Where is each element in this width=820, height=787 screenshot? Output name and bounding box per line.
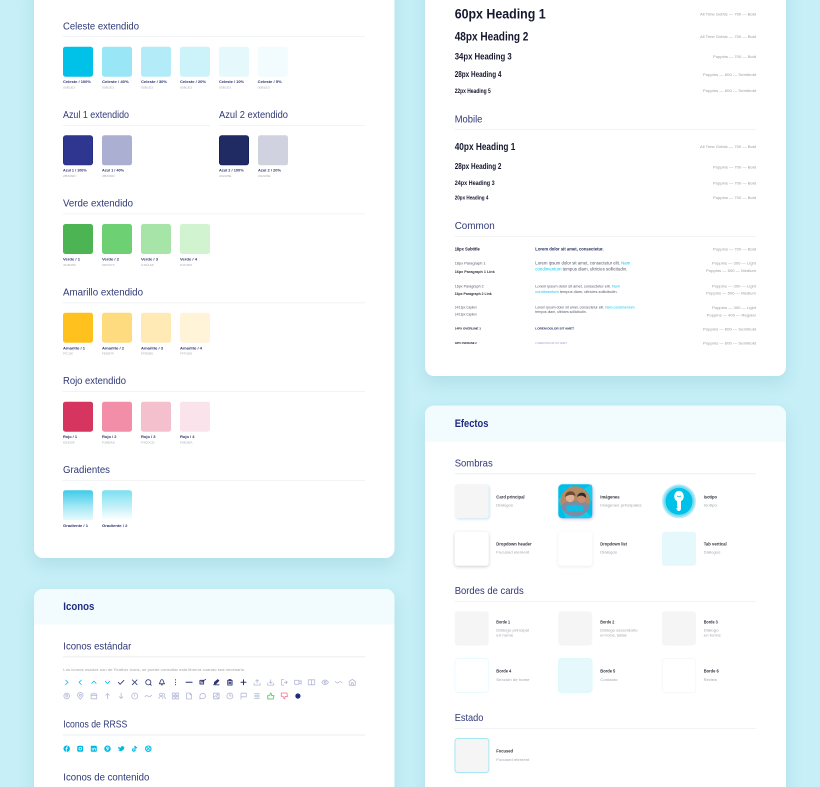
dropdown header shadow sample: Dropdown header (496, 542, 532, 547)
section: Rojo extendido: F28EA8 (102, 440, 115, 444)
common text styles: Poppins — 300 — Light (712, 284, 756, 288)
section: Amarillo extendido: Amarillo / 4 (180, 346, 203, 350)
common text styles: Poppins — 300 — Light (712, 306, 756, 310)
desktop headings: Poppins — 600 — Semibold (703, 73, 756, 77)
common text styles: 16px Paragraph 1 (455, 261, 486, 266)
mobile headings: 24px Heading 3 (455, 180, 495, 187)
section: Celeste extendido: 00B1E3 (102, 85, 114, 89)
imágenes shadow sample: Imágenes principales (600, 503, 642, 508)
panel: iconos (34, 589, 394, 787)
desktop headings: 34px Heading 3 (455, 52, 512, 62)
section: Rojo extendido: Rojo extendido (63, 375, 126, 387)
isotipo shadow sample: Isotipo (704, 495, 717, 500)
common text styles: tempus diam, ultricies sollicitudin. (535, 310, 587, 314)
common text styles: Poppins — 600 — Semibold (703, 328, 756, 332)
card principal shadow sample (455, 484, 525, 518)
common text styles: condimentum tempus diam, ultricies sollicitudin. (535, 266, 627, 272)
common text styles: condimentum tempus diam, ultricies sollicitudin. (535, 289, 618, 294)
mobile headings: Poppins — 700 — Bold (713, 166, 756, 170)
imágenes shadow sample (558, 484, 642, 518)
section: Azul 2 extendido (219, 109, 365, 178)
borde 6: Review (704, 677, 717, 682)
tab vertical sample: Diálogos (704, 550, 720, 555)
dropdown list shadow sample: Dropdown list (600, 542, 628, 547)
section: Celeste extendido: 00B1E3 (180, 85, 192, 89)
borde 5: Borde 5 (600, 669, 616, 674)
section: Bordes de cards (455, 585, 756, 692)
mobile headings: Mobile (455, 114, 483, 126)
common text styles: Poppins — 500 — Medium (706, 292, 756, 296)
heading: Iconos estándar: Iconos estándar (63, 640, 132, 652)
focused state sample: Focused (496, 749, 513, 754)
section: Azul 2 extendido: 202A5E (258, 174, 270, 178)
desktop headings: Poppins — 700 — Bold (713, 55, 756, 59)
borde 3 (662, 612, 721, 646)
borde 1: Borde 1 (496, 619, 511, 624)
mobile headings: Poppins — 700 — Bold (713, 196, 756, 200)
common text styles: 16px Paragraph 1 Link (455, 269, 495, 274)
borde 5: Contacto (600, 677, 618, 682)
section: Celeste extendido: Celeste extendido (63, 20, 139, 32)
section: Amarillo extendido (63, 286, 365, 356)
section: Verde extendido: Verde / 3 (141, 258, 158, 262)
section: Celeste extendido: Celeste / 5% (258, 80, 282, 84)
mobile headings: All Time Gothic — 700 — Bold (700, 145, 756, 149)
section: Celeste extendido: Celeste / 40% (102, 80, 130, 84)
section: Sombras: Sombras (455, 458, 493, 470)
section: Verde extendido (63, 198, 365, 267)
section: Estado (455, 712, 756, 772)
desktop headings: 22px Heading 5 (455, 88, 491, 95)
panel: tipografía (425, 0, 786, 376)
desktop headings: Poppins — 600 — Semibold (703, 89, 756, 93)
section: Azul 2 extendido: Azul 2 / 100% (219, 169, 244, 173)
section: Verde extendido: Verde / 4 (180, 258, 198, 262)
focused state sample (455, 738, 530, 772)
section: Celeste extendido: Celeste / 20% (180, 80, 207, 84)
borde 3: Diálogo (704, 628, 720, 633)
common text styles: Poppins — 400 — Regular (707, 314, 757, 318)
common text styles: Lorem ipsum dolor sit amet, consectetur elit. Nam condimentum (535, 306, 635, 310)
common text styles: 16px Paragraph 2 Link (455, 292, 492, 296)
dropdown list shadow sample (558, 532, 628, 566)
desktop headings: 60px Heading 1 (455, 6, 546, 21)
card principal shadow sample: Diálogos (496, 503, 513, 508)
common text styles: Poppins — 500 — Medium (706, 269, 756, 273)
section: Celeste extendido: 00B1E3 (141, 85, 153, 89)
section: Amarillo extendido: FEDB7F (102, 352, 114, 356)
section: Amarillo extendido: Amarillo extendido (63, 286, 143, 298)
section: Verde extendido: Verde / 2 (102, 258, 119, 262)
borde 2: Borde 2 (600, 619, 615, 624)
common text styles (455, 220, 757, 346)
header band: Efectos: Efectos (455, 418, 488, 430)
common text styles: Poppins — 700 — Bold (713, 248, 756, 252)
isotipo shadow sample (662, 484, 718, 518)
desktop headings: All Time Gothic — 700 — Bold (700, 12, 756, 16)
icon row 2 (64, 692, 301, 699)
section: Estado: Estado (455, 712, 484, 724)
common text styles: Poppins — 300 — Light (712, 262, 756, 266)
dropdown header shadow sample (455, 532, 532, 566)
section: Verde extendido: Verde / 1 (63, 258, 80, 262)
section: Rojo extendido: F4C0CD (141, 440, 155, 444)
section: Amarillo extendido: Amarillo / 3 (141, 346, 163, 350)
header band: Iconos: Iconos (63, 601, 94, 613)
section: Azul 2 extendido: 202A5E (219, 174, 232, 178)
section: Azul 2 extendido: Azul 2 extendido (219, 109, 288, 121)
borde 6: Borde 6 (704, 669, 719, 674)
common text styles: Lorem ipsum dolor sit amet, consectetur elit. Nam (535, 261, 631, 266)
mobile headings: 40px Heading 1 (455, 141, 516, 153)
section: Rojo extendido: Rojo / 4 (180, 435, 196, 439)
common text styles: 14/13px Caption (455, 312, 477, 316)
section: Rojo extendido: Rojo / 2 (102, 435, 116, 439)
section: Rojo extendido (63, 375, 365, 444)
section: Celeste extendido: Celeste / 10% (219, 80, 245, 84)
common text styles: Lorem dolor sit amet, consectetur. (535, 247, 604, 252)
tab vertical sample: Tab vertical (704, 542, 727, 547)
isotipo shadow sample: Isotipo (704, 503, 718, 508)
section: Rojo extendido: FAE3EA (180, 440, 193, 444)
section: Verde extendido: D1F3D0 (180, 263, 192, 267)
tab vertical sample (662, 532, 727, 566)
section: Amarillo extendido: Amarillo / 2 (102, 346, 124, 350)
imágenes shadow sample: Imágenes (600, 495, 620, 500)
common text styles: LOREM DOLOR SIT AMET (535, 327, 574, 331)
borde 5 (558, 658, 618, 692)
common text styles: 14PX OVERLINE 1 (455, 327, 481, 331)
section: Amarillo extendido: Amarillo / 1 (63, 346, 85, 350)
mobile headings: Poppins — 700 — Bold (713, 182, 756, 186)
heading: Iconos de RRSS: Iconos de RRSS (63, 719, 127, 731)
section: Gradientes (63, 464, 365, 528)
borde 4 (455, 658, 530, 692)
desktop headings: All Time Gothic — 700 — Bold (700, 35, 756, 39)
focused state sample: Focused element (496, 757, 530, 762)
common text styles: Poppins — 600 — Semibold (703, 342, 756, 346)
section: Verde extendido: 6DD073 (102, 263, 115, 267)
card principal shadow sample: Card principal (496, 495, 525, 500)
description text: Los iconos usados son de Feather Icons, se puede consultar esta librería cuando sea necesario. (63, 667, 245, 672)
section: Bordes de cards: Bordes de cards (455, 585, 524, 597)
borde 4: Borde 4 (496, 669, 512, 674)
borde 2 (558, 612, 638, 646)
section: Gradientes: Gradientes (63, 464, 110, 476)
borde 1 (455, 612, 529, 646)
dropdown header shadow sample: Focused element (496, 550, 530, 555)
panel: color palette (34, 0, 394, 558)
heading: Iconos de contenido: Iconos de contenido (63, 772, 149, 784)
desktop headings: 28px Heading 4 (455, 70, 502, 79)
icon row 1 (66, 679, 355, 685)
common text styles: LOREM DOLOR SIT AMET (535, 341, 567, 345)
borde 4: Sección de home (496, 677, 530, 682)
common text styles: Common (455, 220, 495, 232)
section: Gradientes: Gradiente / 2 (102, 524, 128, 528)
section: Gradientes: Gradiente / 1 (63, 524, 88, 528)
mobile headings: 20px Heading 4 (455, 196, 489, 202)
section: Rojo extendido: Rojo / 3 (141, 435, 156, 439)
section: Celeste extendido: 00B1E3 (258, 85, 270, 89)
common text styles: 14/13px Caption (455, 306, 477, 310)
borde 1: Diálogo principal (496, 628, 529, 633)
section: Azul 1 extendido: Azul 1 / 40% (102, 169, 125, 173)
common text styles: 12PX OVERLINE 2 (455, 341, 477, 345)
mobile headings: 28px Heading 2 (455, 162, 502, 171)
section: Azul 1 extendido (63, 109, 210, 178)
section: Verde extendido: A7E4A8 (141, 263, 154, 267)
social icons (63, 746, 151, 752)
header band: Iconos (34, 589, 394, 624)
borde 2: Diálogo secundario (600, 628, 638, 633)
section: Azul 1 extendido: 2B3990 (102, 174, 115, 178)
section: Amarillo extendido: FFF3D8 (180, 352, 192, 356)
panel: efectos (425, 406, 786, 787)
section: Celeste extendido: Celeste / 100% (63, 80, 92, 84)
section: Rojo extendido: Rojo / 1 (63, 435, 77, 439)
section: Azul 2 extendido: Azul 2 / 20% (258, 169, 282, 173)
header band: Efectos (425, 406, 786, 442)
section: Verde extendido: Verde extendido (63, 198, 133, 210)
common text styles: 18px Subtitle (455, 247, 480, 252)
section: Azul 1 extendido: Azul 1 extendido (63, 109, 129, 121)
dropdown list shadow sample: Diálogos (600, 550, 617, 555)
borde 3: Borde 3 (704, 619, 718, 624)
borde 1: en home (496, 633, 514, 638)
section: Sombras (455, 458, 756, 566)
section: Azul 1 extendido: 2B3990 (63, 174, 76, 178)
borde 6 (662, 658, 719, 692)
section: Celeste extendido: 00B1E3 (63, 85, 75, 89)
desktop headings (455, 6, 756, 95)
common text styles: 16px Paragraph 2 (455, 284, 484, 288)
section: Amarillo extendido: FFE9B5 (141, 352, 153, 356)
section: Celeste extendido: 00B1E3 (219, 85, 231, 89)
borde 2: en home, tablas (600, 633, 627, 638)
desktop headings: 48px Heading 2 (455, 31, 528, 43)
section: Verde extendido: 4CB452 (63, 263, 76, 267)
section: Celeste extendido (63, 20, 365, 89)
mobile headings (455, 114, 756, 202)
section: Rojo extendido: D5355F (63, 440, 75, 444)
section: Celeste extendido: Celeste / 30% (141, 80, 168, 84)
common text styles: Lorem ipsum dolor sit amet, consectetur elit. Nam (535, 283, 620, 288)
borde 3: en forms (704, 633, 721, 638)
section: Azul 1 extendido: Azul 1 / 100% (63, 169, 87, 173)
section: Amarillo extendido: FFC11E (63, 352, 73, 356)
